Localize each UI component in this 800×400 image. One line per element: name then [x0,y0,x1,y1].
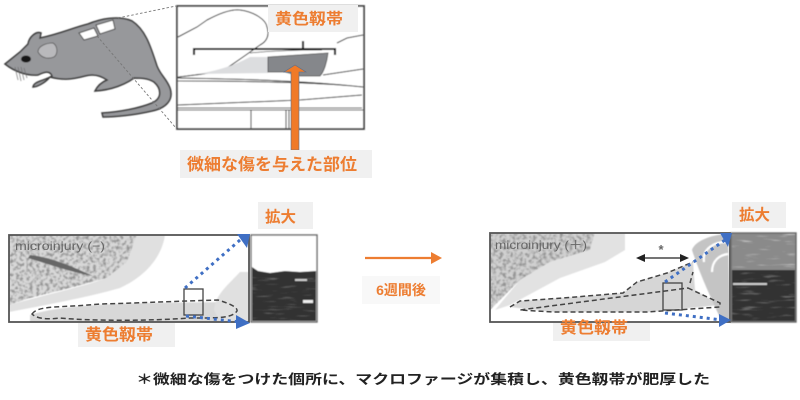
blue zoom arrows minus [185,234,250,329]
orange arrow to injury site [284,65,306,150]
label: injury site: 微細な傷を与えた部位 [187,154,358,174]
label: enlarge minus [258,202,313,229]
label: injury site [180,150,372,178]
label: after six weeks: 6週間後 [376,282,426,298]
tendon injured region [268,53,328,76]
label: yellow ligament minus [78,323,175,347]
tendon light region [196,57,268,74]
label: enlarge plus: 拡大 [739,206,770,224]
label: yellow ligament plus: 黄色靱帯 [560,318,628,337]
label: after six weeks [362,276,440,304]
tissue texture [9,235,249,322]
label: yellow ligament minus: 黄色靱帯 [85,325,153,344]
mouse ear [38,43,57,58]
double arrow [636,254,689,262]
incision patches [79,20,115,40]
panel frame [490,233,730,322]
microinjury label: microinjury (−) [15,239,105,253]
dashed outline [510,262,720,312]
label: enlarge plus [732,202,786,228]
panel: microinjury plus [490,233,730,322]
arrow: six weeks [365,252,442,264]
tissue texture [490,233,730,322]
mouse eye [21,56,31,62]
anatomy diagram panel [177,6,364,129]
mouse whiskers [15,67,27,81]
label: yellow ligament plus [553,318,650,341]
label: enlarge minus: 拡大 [265,208,296,226]
magnified image plus [731,233,796,322]
label: yellow ligament top [268,5,358,32]
panel: microinjury minus [9,235,249,322]
zoom guide lines [97,6,176,128]
selection box [184,289,203,315]
caption: ＊微細な傷をつけた個所に、マクロファージが集積し、黄色靱帯が肥厚した [136,371,710,387]
label: yellow ligament top: 黄色靱帯 [275,9,343,28]
selection box [663,283,682,310]
panel frame [9,235,249,322]
dashed outline [32,300,237,320]
blue zoom arrows plus [665,233,732,327]
tendon bracket [194,41,335,55]
microinjury label: microinjury (＋) [495,238,587,252]
asterisk: * [658,242,664,257]
magnified image minus [251,235,317,322]
mouse illustration [5,18,171,117]
